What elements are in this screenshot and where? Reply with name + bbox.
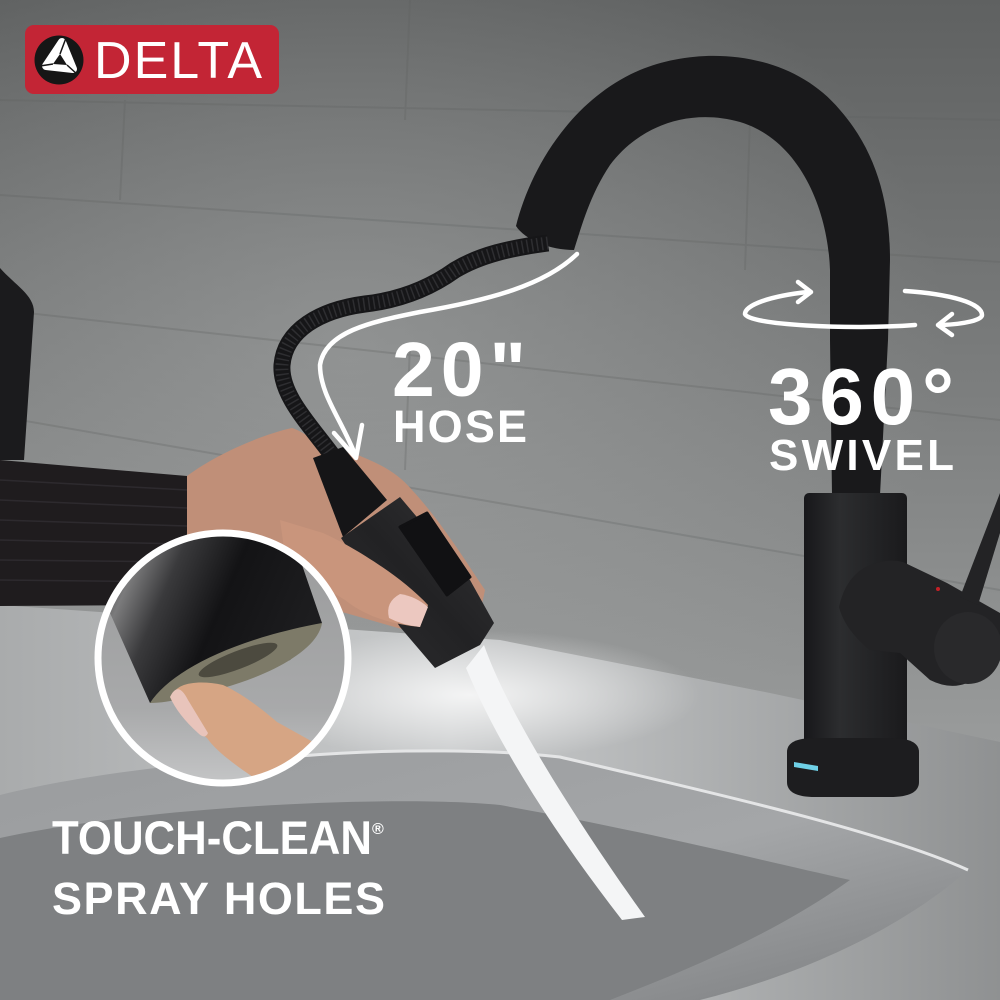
handle [839,561,1000,686]
head button [400,513,470,595]
nozzle centre [198,642,278,678]
blue light [794,762,818,771]
label: 360 degree swivel [768,352,954,480]
logo: Delta badge [25,25,279,94]
handle end cap [934,612,1000,684]
head body [341,497,494,668]
hand [187,428,485,640]
inset ring [98,533,348,783]
label: 20 inch hose: 20" [392,327,526,413]
logo wordmark: DELTA [94,32,262,90]
label: touch-clean spray holes [52,811,385,924]
faucet base [804,493,907,745]
faucet [516,56,1000,797]
counter highlight [240,630,700,760]
spray head [313,447,494,668]
dark vase at left edge [0,268,34,460]
inset: spray holes circle [98,530,348,783]
finger [172,683,313,777]
hose connector [313,447,387,537]
finger nail [170,689,208,736]
label: touch-clean spray holes: TOUCH-CLEAN [52,811,372,864]
lever [960,493,1000,605]
water stream [466,645,645,920]
background: tiled wall [0,0,1000,780]
label: 20 inch hose: HOSE [393,401,527,452]
braided hose [282,243,548,455]
front finger [280,520,428,627]
background: counter top [0,605,1000,1000]
arrow: hose length [320,254,577,458]
nozzle face [150,623,322,703]
base plate [787,738,919,797]
logo mark [34,36,84,84]
fingernail [388,594,428,627]
sweater sleeve [0,460,190,606]
sink basin [0,752,968,1000]
label: 360 degree swivel: 360° [768,352,954,441]
label: touch-clean spray holes: SPRAY HOLES [52,873,385,924]
label: 20 inch hose [392,327,527,452]
red dot [936,587,940,591]
faucet spout [516,56,890,495]
arrow: swivel rotation [745,282,982,335]
label: touch-clean spray holes: ® [372,821,384,838]
label: 360 degree swivel: SWIVEL [769,431,954,480]
nozzle cylinder [110,530,322,703]
